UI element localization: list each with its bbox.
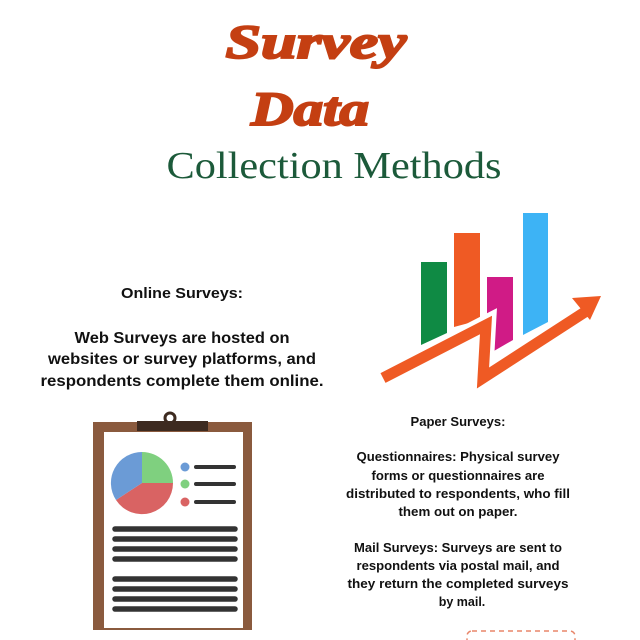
text block: paper surveys	[346, 415, 570, 609]
text block: paper surveys: them out on paper.	[398, 505, 518, 519]
text block: online surveys	[40, 285, 324, 390]
text block: online surveys: websites or survey platforms, and	[47, 351, 316, 368]
text block: paper surveys: forms or questionnaires are	[372, 469, 545, 483]
title	[166, 16, 502, 187]
dashed box	[467, 631, 575, 640]
text block: paper surveys: Paper Surveys:	[410, 415, 506, 429]
text block: paper surveys: by mail.	[439, 595, 485, 609]
legend	[180, 462, 234, 506]
text block: online surveys: respondents complete them online.	[40, 373, 324, 390]
text block: paper surveys: distributed to respondents, who fill	[346, 487, 570, 501]
icon: bar chart with arrow	[383, 213, 601, 378]
icon: clipboard	[93, 413, 252, 630]
text block: online surveys: Web Surveys are hosted on	[74, 330, 290, 347]
text lines	[115, 529, 235, 609]
pie chart	[111, 452, 173, 514]
title: Data	[250, 83, 369, 136]
text block: online surveys: Online Surveys:	[121, 285, 243, 302]
text block: paper surveys: Questionnaires: Physical survey	[356, 450, 560, 464]
text block: paper surveys: Mail Surveys: Surveys are sent to	[354, 541, 562, 555]
title: Collection Methods	[166, 145, 502, 187]
title: Survey	[226, 16, 407, 69]
text block: paper surveys: respondents via postal mail, and	[356, 559, 560, 573]
text block: paper surveys: they return the completed surveys	[348, 577, 569, 591]
